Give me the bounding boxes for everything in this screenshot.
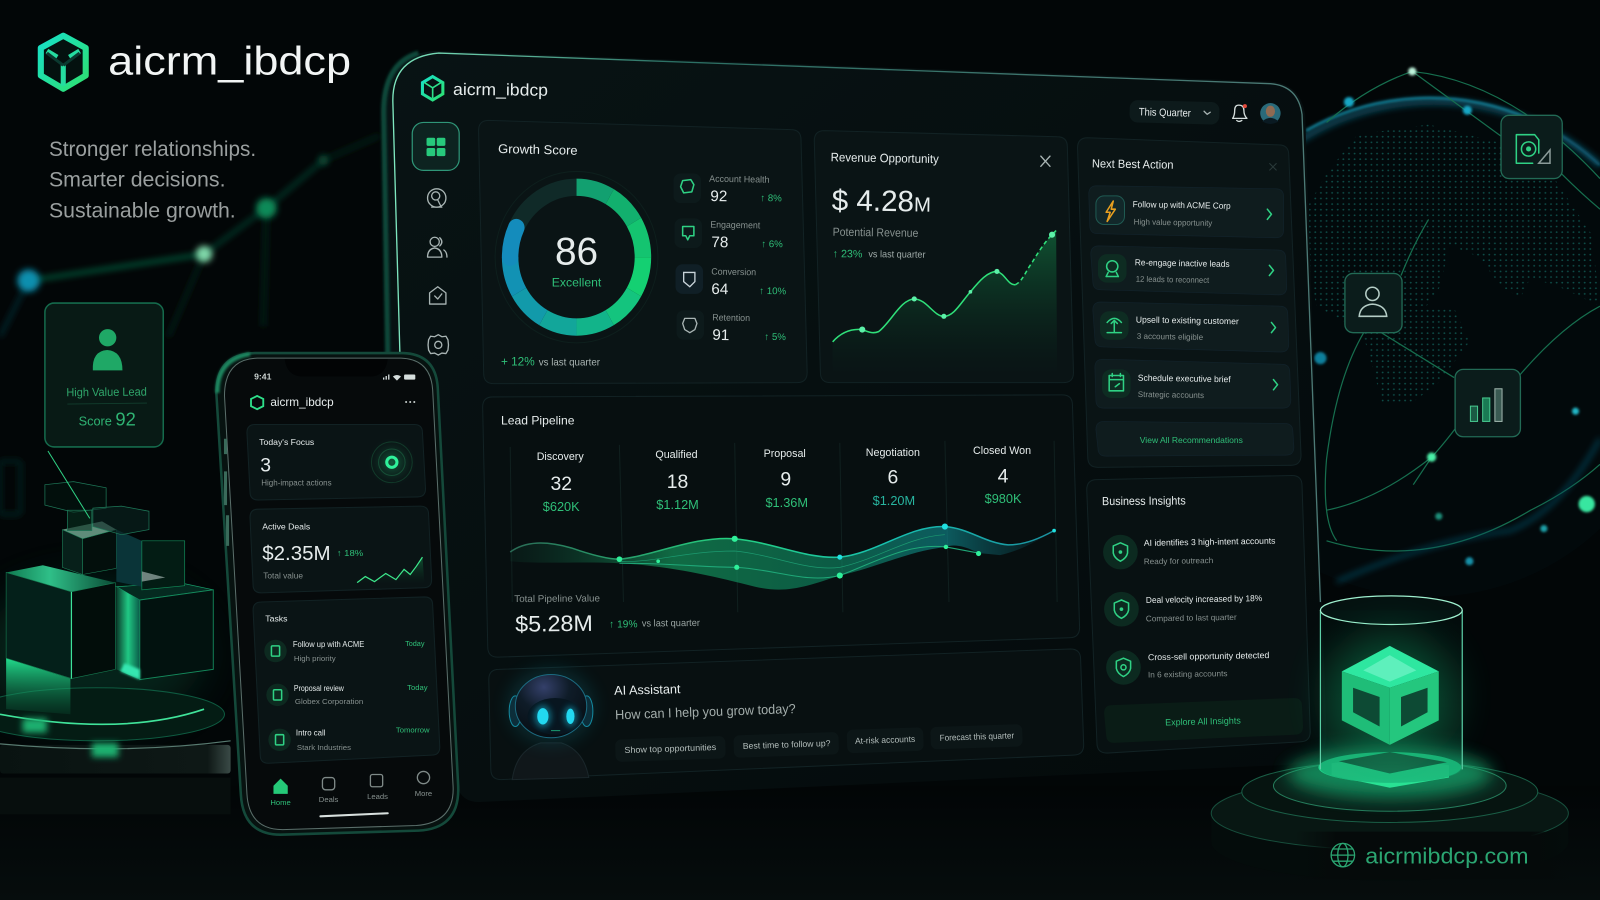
tablet frame: [382, 51, 1327, 802]
revenue area chart: [833, 231, 1057, 376]
score value: 86: [555, 230, 598, 273]
task: follow up: Today: [405, 639, 425, 648]
brand logo: [41, 36, 86, 89]
total pipeline value: $5.28M: [515, 611, 593, 637]
card: active deals: ↑ 18%: [337, 548, 364, 558]
heading: Revenue Opportunity: [831, 150, 940, 166]
website url: aicrmibdcp.com: [1365, 843, 1529, 868]
stage: proposal: Proposal: [764, 448, 806, 460]
tab: deals: Deals: [319, 795, 339, 804]
network lines: [1325, 71, 1600, 551]
action: re-engage: Re-engage inactive leads: [1135, 257, 1230, 269]
insight: cross-sell: Cross-sell opportunity detected: [1148, 650, 1270, 662]
tablet header name: aicrm_ibdcp: [453, 80, 548, 100]
panel: next best action: [1078, 138, 1301, 467]
panel: growth score: [479, 120, 807, 384]
nav icon: settings: [428, 335, 448, 355]
tab: leads: [367, 774, 388, 801]
task: follow up: High priority: [294, 654, 336, 663]
action: upsell: 3 accounts eligible: [1137, 332, 1204, 342]
action: re-engage: [1091, 246, 1287, 295]
total pipeline value: vs last quarter: [642, 618, 701, 630]
task: intro call: Stark Industries: [297, 743, 351, 752]
panel: lead pipeline: [483, 395, 1080, 657]
insight: deal velocity: Deal velocity increased by 18%: [1146, 593, 1263, 605]
metric: account health: [673, 173, 782, 205]
stage: discovery: $620K: [543, 499, 580, 514]
globe with dot map: [1179, 67, 1600, 597]
card: tasks: [253, 597, 440, 763]
continents dot pattern: [1309, 124, 1600, 404]
button: explore insights: Explore All Insights: [1165, 716, 1241, 728]
icon: more menu: [405, 401, 415, 403]
phone logo: [251, 396, 263, 409]
action: schedule: [1095, 359, 1291, 408]
active nav tile: [412, 122, 459, 170]
card: tasks: Tasks: [265, 613, 288, 623]
tagline: [49, 137, 256, 222]
action: follow up: High value opportunity: [1134, 217, 1213, 228]
panel: ai assistant: [489, 649, 1084, 780]
chip: at-risk: [847, 727, 924, 753]
nav icon: deals: [430, 287, 446, 304]
icon: bell: [1233, 104, 1247, 121]
stage: discovery: Discovery: [537, 451, 584, 463]
stage: closed won: [973, 445, 1031, 506]
total pipeline value: ↑ 19%: [609, 619, 638, 631]
status bar: 9:41: [254, 372, 272, 382]
pedestal discs: [1211, 749, 1568, 881]
metric: conversion: Conversion: [711, 266, 756, 277]
ai assistant heading: AI Assistant: [614, 681, 681, 698]
chip: top opportunities: [615, 736, 726, 762]
task: intro call: Intro call: [296, 729, 326, 738]
stage: discovery: 32: [550, 473, 572, 495]
insight: high-intent accounts: AI identifies 3 high-intent accounts: [1144, 536, 1276, 548]
chip: at-risk: At-risk accounts: [855, 734, 916, 746]
tablet header logo: [422, 77, 443, 100]
glowing bases: [6, 658, 70, 714]
chip: best time: [733, 732, 839, 758]
high value lead card: [45, 303, 163, 447]
growth trend: vs last quarter: [539, 357, 601, 368]
stage: negotiation: [866, 447, 920, 508]
heading: Growth Score: [498, 141, 578, 158]
tagline: Stronger relationships.: [49, 137, 256, 161]
insight: deal velocity: [1104, 592, 1263, 627]
action: follow up: Follow up with ACME Corp: [1133, 199, 1231, 211]
action: upsell: [1093, 302, 1289, 352]
tab: leads: Leads: [367, 792, 388, 801]
glowing cube: [1327, 633, 1453, 759]
ai question: How can I help you grow today?: [615, 701, 796, 722]
background network left: [0, 136, 380, 514]
icon: close: [1041, 156, 1050, 166]
stage: qualified: $1.12M: [656, 497, 699, 512]
action: upsell: Upsell to existing customer: [1136, 314, 1239, 326]
score ring chart: [495, 171, 658, 343]
icon: globe: [1331, 843, 1355, 867]
dashboard tablet: [382, 51, 1327, 802]
card: today's focus: High-impact actions: [261, 479, 332, 488]
stage: negotiation: $1.20M: [873, 493, 915, 508]
total pipeline value: [514, 593, 701, 637]
floating tile: document: [1501, 115, 1562, 179]
left glass cube stack: [0, 451, 231, 814]
revenue label: Potential Revenue: [833, 226, 918, 240]
revenue delta: vs last quarter: [868, 249, 926, 261]
stage: qualified: 18: [667, 471, 688, 493]
chip: best time: Best time to follow up?: [743, 738, 831, 751]
stage: qualified: [655, 449, 699, 512]
avatar: [1260, 103, 1281, 124]
insight: cross-sell: In 6 existing accounts: [1148, 669, 1228, 680]
phone body: [216, 353, 458, 835]
quarter selector: This Quarter: [1139, 106, 1191, 120]
pipeline wave chart: [510, 523, 1056, 590]
lead label: High Value Lead: [66, 386, 147, 399]
button: view all: View All Recommendations: [1140, 435, 1244, 445]
growth trend: + 12%: [501, 355, 535, 368]
status bar: [254, 372, 415, 382]
task: proposal review: [266, 683, 428, 706]
icon: person: [93, 329, 122, 370]
metric: conversion: 64: [711, 281, 729, 298]
action: schedule: Schedule executive brief: [1138, 373, 1231, 384]
stage: proposal: 9: [780, 469, 791, 491]
metric: retention: Retention: [712, 312, 750, 323]
sidebar navigation: [412, 122, 459, 355]
panel: business insights: [1087, 476, 1310, 753]
chip: forecast: Forecast this quarter: [940, 730, 1014, 743]
insight: high-intent accounts: [1103, 535, 1276, 569]
action: re-engage: 12 leads to reconnect: [1136, 275, 1210, 285]
big cube right: [116, 583, 213, 680]
stage: negotiation: 6: [887, 467, 898, 489]
deals sparkline: [357, 557, 424, 584]
pedestal: [0, 688, 231, 814]
metric: conversion: ↑ 10%: [759, 286, 787, 297]
website backing: [1296, 832, 1571, 880]
nav icon: people: [428, 237, 447, 257]
floating tile: bar chart: [1455, 369, 1520, 437]
glass cylinder: [1320, 596, 1462, 783]
card: today's focus: Today's Focus: [259, 437, 315, 447]
stage: qualified: Qualified: [655, 449, 698, 461]
tab: deals: [319, 778, 339, 804]
metric: engagement: [674, 218, 783, 251]
stage: negotiation: Negotiation: [866, 447, 920, 459]
chip: forecast: [930, 724, 1023, 749]
metric: account health: Account Health: [709, 174, 770, 185]
stage: proposal: $1.36M: [765, 495, 808, 510]
metric: account health: ↑ 8%: [760, 193, 782, 204]
action: schedule: Strategic accounts: [1138, 390, 1204, 400]
metric: engagement: ↑ 6%: [761, 239, 783, 250]
chip: top opportunities: Show top opportunities: [624, 742, 717, 755]
brand name: aicrm_ibdcp: [108, 39, 351, 83]
button: explore insights: [1104, 698, 1303, 743]
task: proposal review: Today: [407, 683, 428, 692]
task: follow up: Follow up with ACME: [293, 640, 365, 649]
revenue delta: ↑ 23%: [833, 248, 863, 260]
insight: deal velocity: Compared to last quarter: [1146, 613, 1237, 623]
total pipeline value: Total Pipeline Value: [514, 593, 600, 605]
icon: dismiss: [1269, 163, 1277, 170]
card: active deals: $2.35M: [262, 543, 331, 565]
card: active deals: Active Deals: [262, 522, 311, 532]
insight: cross-sell: [1106, 650, 1270, 685]
home indicator: [320, 813, 388, 816]
card: active deals: Total value: [263, 572, 304, 581]
metric: conversion: [676, 264, 787, 298]
heading: Next Best Action: [1092, 157, 1174, 172]
heading: Lead Pipeline: [501, 413, 575, 427]
score label: Excellent: [552, 276, 602, 290]
task: follow up: [264, 639, 425, 663]
tab: more: More: [415, 789, 432, 798]
tagline: Smarter decisions.: [49, 168, 226, 192]
heading: Business Insights: [1102, 495, 1186, 508]
notch: [285, 359, 388, 377]
metric: account health: 92: [710, 188, 727, 205]
button: view all: [1096, 421, 1294, 456]
card: active deals: [250, 506, 432, 593]
stage: closed won: $980K: [985, 491, 1022, 506]
phone: [216, 353, 458, 835]
stage: closed won: Closed Won: [973, 445, 1031, 457]
task: proposal review: Globex Corporation: [295, 697, 363, 706]
side buttons: [226, 439, 228, 546]
phone tab bar: [270, 771, 432, 807]
card: today's focus: [247, 424, 426, 500]
growth trend: [501, 355, 601, 368]
stage: closed won: 4: [998, 466, 1009, 488]
revenue value: $ 4.28M: [832, 184, 931, 219]
big cube left: [6, 565, 115, 679]
lead score: Score 92: [79, 409, 136, 430]
floating tile: person: [1345, 273, 1402, 333]
metric: engagement: 78: [711, 234, 728, 251]
insight: high-intent accounts: Ready for outreach: [1144, 556, 1213, 566]
small cubes on top: [45, 482, 149, 535]
stage: proposal: [764, 448, 808, 510]
revenue delta: [833, 248, 926, 261]
metric: retention: ↑ 5%: [764, 332, 786, 343]
metric: retention: [677, 310, 786, 344]
phone brand name: aicrm_ibdcp: [270, 396, 334, 409]
task: intro call: Tomorrow: [396, 726, 430, 735]
stage: discovery: [537, 451, 584, 514]
network nodes: [1314, 67, 1595, 565]
action: follow up: [1089, 186, 1284, 238]
tagline: Sustainable growth.: [49, 198, 236, 222]
card: today's focus: 3: [260, 454, 271, 476]
metric: engagement: Engagement: [710, 220, 761, 230]
tab: home: [270, 779, 291, 807]
nav icon: targets: [428, 189, 446, 207]
tab: more: [415, 771, 432, 798]
robot mascot: [507, 667, 595, 780]
task: intro call: [268, 726, 430, 752]
right pedestal with holographic cube: [1211, 596, 1571, 881]
tab: home: Home: [270, 798, 291, 807]
icon: target: [367, 438, 416, 487]
quarter selector: [1129, 100, 1220, 125]
middle cubes: [62, 521, 185, 590]
panel: revenue opportunity: [814, 131, 1073, 383]
metric: retention: 91: [712, 327, 729, 344]
ambient glow: [0, 582, 204, 724]
floor: [0, 786, 1600, 900]
task: proposal review: Proposal review: [294, 684, 344, 693]
